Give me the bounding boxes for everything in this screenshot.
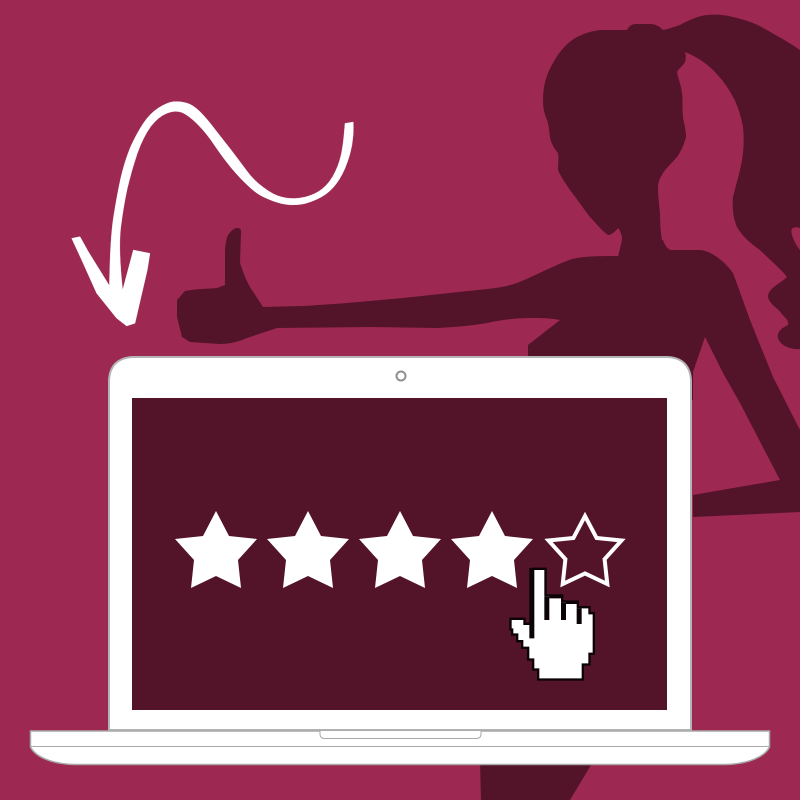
laptop xyxy=(30,357,770,764)
silhouette: head and neck xyxy=(543,24,686,270)
star 1 filled xyxy=(175,511,257,588)
silhouette: torso and right arm xyxy=(560,240,800,517)
laptop camera xyxy=(396,372,406,380)
laptop lid xyxy=(109,357,691,730)
silhouette: woman giving thumbs up xyxy=(177,15,800,800)
star 4 filled xyxy=(451,511,533,588)
star 2 filled xyxy=(267,511,349,588)
hair notch xyxy=(791,227,800,250)
silhouette: ponytail xyxy=(660,15,800,349)
icon: pointing hand cursor xyxy=(512,568,593,678)
arrow: hand-drawn curved arrow pointing down xyxy=(72,101,353,326)
star rating xyxy=(175,511,622,588)
laptop trackpad notch xyxy=(320,731,481,738)
star 3 filled xyxy=(359,511,441,588)
arrow shaft xyxy=(109,101,353,290)
laptop screen xyxy=(132,398,667,710)
laptop base xyxy=(30,731,770,764)
arrow head xyxy=(72,237,150,326)
silhouette: legs below laptop xyxy=(480,760,594,800)
laptop base crease xyxy=(31,746,769,748)
silhouette: hand with raised thumb and arm xyxy=(177,228,620,360)
star 5 outline xyxy=(548,516,622,584)
